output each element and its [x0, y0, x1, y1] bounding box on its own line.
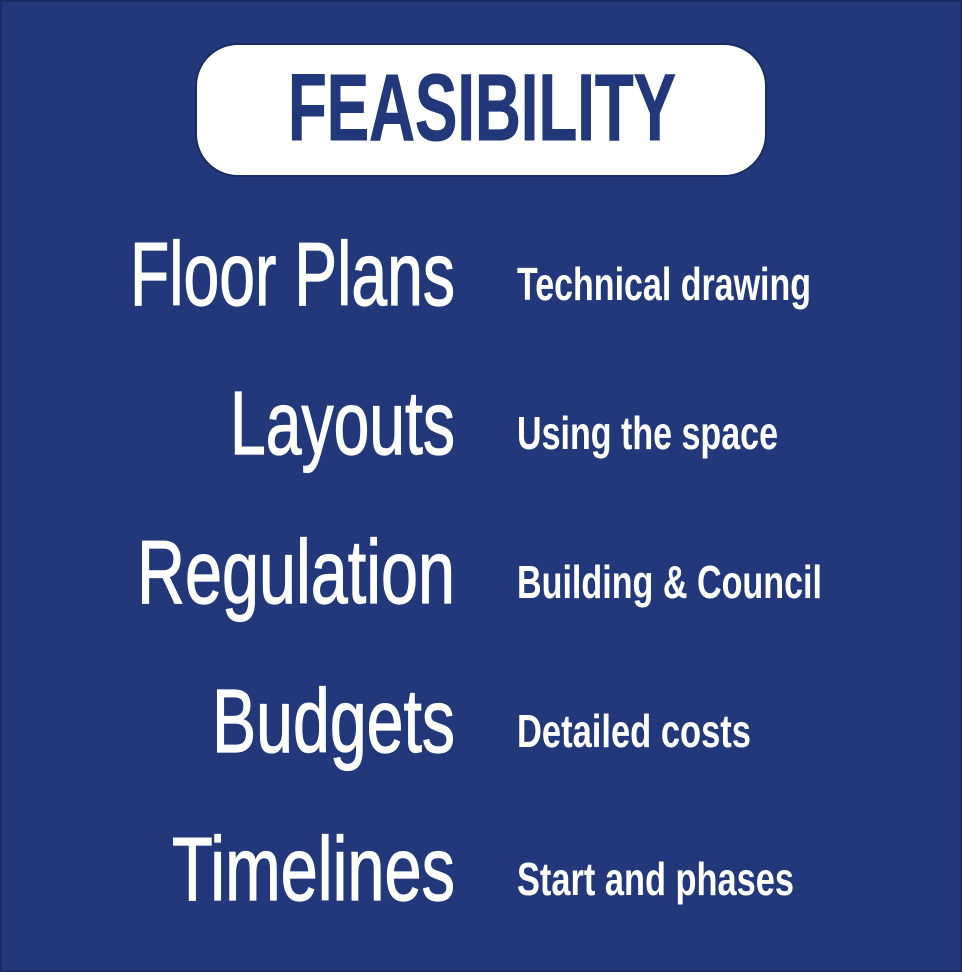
- row: regulation: Regulation: [137, 523, 455, 623]
- row: layouts: Layouts: [230, 374, 455, 474]
- row: floor plans: Technical drawing: [517, 258, 811, 310]
- row: timelines: Timelines: [172, 820, 455, 920]
- row: regulation: Building & Council: [517, 556, 822, 608]
- title pill: FEASIBILITY: [288, 55, 676, 161]
- row: layouts: Using the space: [517, 407, 778, 459]
- row: floor plans: Floor Plans: [130, 225, 455, 325]
- row: timelines: [172, 820, 794, 920]
- row: timelines: Start and phases: [517, 853, 794, 905]
- row: budgets: [212, 672, 751, 772]
- row: budgets: Detailed costs: [517, 705, 751, 757]
- title pill: [196, 44, 766, 176]
- row: layouts: [230, 374, 778, 474]
- row: regulation: [137, 523, 822, 623]
- row: floor plans: [130, 225, 811, 325]
- row: budgets: Budgets: [212, 672, 455, 772]
